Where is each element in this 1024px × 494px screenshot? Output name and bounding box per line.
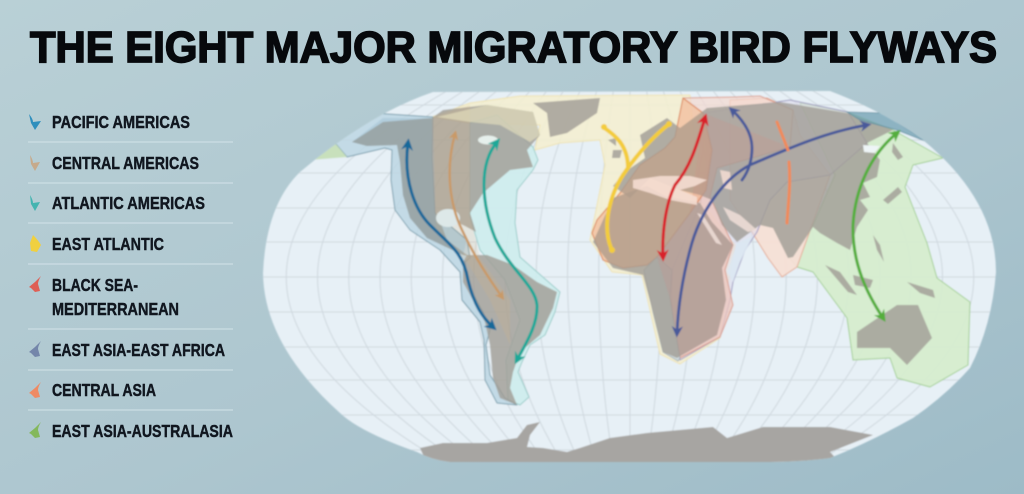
land: Antarctica xyxy=(420,422,873,463)
flyway area: Central Asia xyxy=(730,98,830,277)
inland seas and arctic tint xyxy=(436,105,925,282)
legend item: East Asia-Australasia: EAST ASIA-AUSTRALASIA xyxy=(52,421,233,441)
world map xyxy=(250,85,1010,470)
arrow: Pacific Americas xyxy=(407,143,493,327)
flyway area: Atlantic Americas xyxy=(470,115,560,405)
flyway regions xyxy=(310,95,970,405)
tint: East Atlantic xyxy=(592,98,712,268)
land: Eurasia xyxy=(613,102,893,258)
arrow: East Asia-East Africa xyxy=(677,110,867,333)
legend xyxy=(28,112,233,441)
legend item: Pacific Americas: PACIFIC AMERICAS xyxy=(52,112,190,132)
legend item: East Atlantic: EAST ATLANTIC xyxy=(52,234,164,254)
flyway area: East Asia-Australasia xyxy=(787,103,970,387)
arrow: Black Sea-Mediterranean xyxy=(663,118,705,257)
legend item: Black Sea-Mediterranean xyxy=(29,275,179,319)
tint: Central Americas xyxy=(435,106,508,313)
arrow: East Atlantic xyxy=(601,121,672,253)
arrow: Atlantic Americas xyxy=(484,142,537,360)
tint: Black Sea-Mediterranean xyxy=(660,194,732,357)
land: Australia xyxy=(857,305,932,365)
arrow: East Asia-Australasia xyxy=(853,133,897,318)
flyway area: Pacific Americas xyxy=(335,113,517,405)
legend item: Central Americas: CENTRAL AMERICAS xyxy=(52,153,199,173)
arrow: Central Asia xyxy=(777,122,790,223)
flyway area: west Africa grey-blue xyxy=(644,271,681,362)
flyway area: East Atlantic pale band xyxy=(432,95,735,364)
land: islands xyxy=(608,138,935,298)
legend item: Black Sea-Mediterranean: MEDITERRANEAN xyxy=(52,299,179,319)
legend item: Central Asia: CENTRAL ASIA xyxy=(52,380,156,400)
flyway area: Black Sea-Mediterranean xyxy=(680,94,776,359)
legend item: East Asia-East Africa: EAST ASIA-EAST AFRICA xyxy=(52,340,225,360)
title: THE EIGHT MAJOR MIGRATORY BIRD FLYWAYS xyxy=(30,23,997,72)
flyway area: green wedge near Alaska xyxy=(316,144,346,160)
land: North America xyxy=(352,105,540,258)
flyway area: East Atlantic Africa-Europe xyxy=(592,98,712,268)
land: Greenland xyxy=(533,98,600,137)
arrow: Central Americas xyxy=(450,134,502,297)
land: Africa xyxy=(593,186,733,358)
tint: Pacific Americas xyxy=(352,118,467,255)
legend item: Black Sea-Mediterranean: BLACK SEA- xyxy=(52,275,138,295)
flyway tints over land xyxy=(354,100,732,357)
legend item: Central Asia xyxy=(29,380,156,400)
flyway arrows xyxy=(407,110,897,360)
flyway area: East Asia-East Africa xyxy=(672,100,867,360)
flyway area: Bering strip xyxy=(847,112,925,141)
land: South America xyxy=(463,255,557,405)
land masses xyxy=(352,98,935,470)
legend item: Atlantic Americas: ATLANTIC AMERICAS xyxy=(52,193,205,213)
